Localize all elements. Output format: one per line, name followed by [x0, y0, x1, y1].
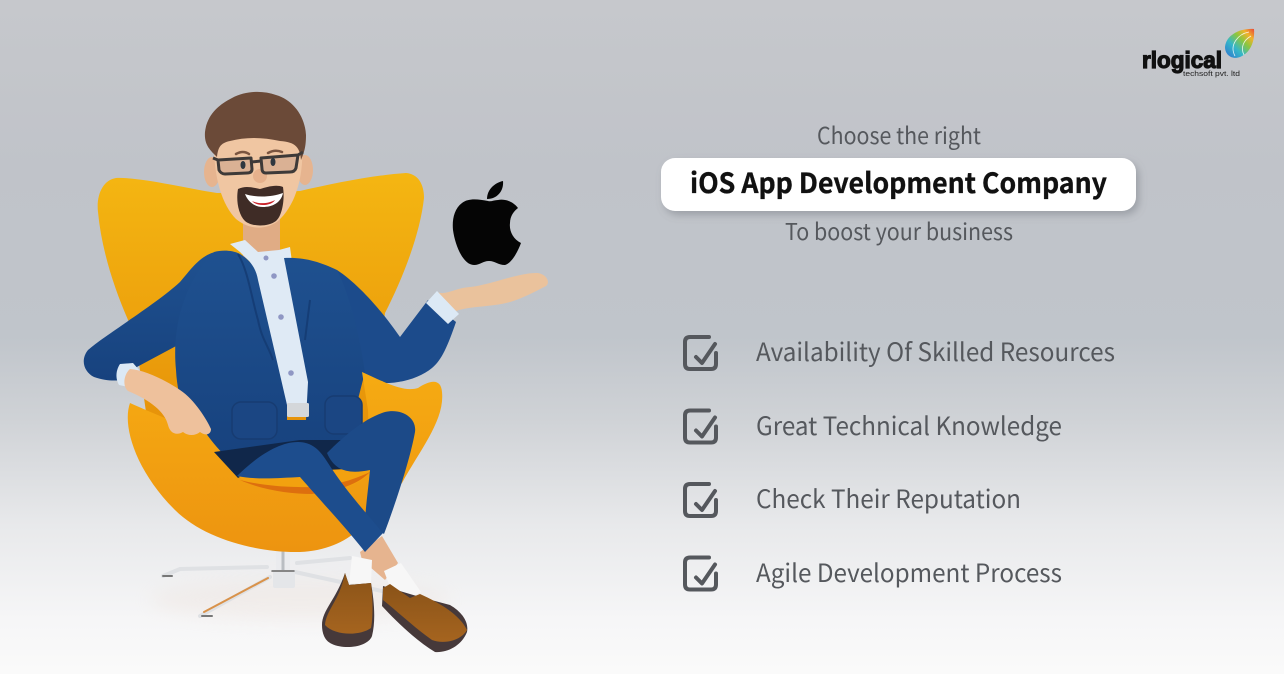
- chair seat bowl: [128, 372, 442, 552]
- front leg: [237, 442, 383, 552]
- icon: logo leaf: [1225, 29, 1254, 58]
- icon: checkbox: [685, 410, 716, 442]
- shirt: [230, 240, 315, 405]
- item text: Availability Of Skilled Resources: [756, 333, 1115, 369]
- subheading: to boost your business: To boost your business: [785, 213, 1013, 247]
- neck: [243, 218, 280, 258]
- logo tagline: techsoft pvt. ltd: [1183, 69, 1240, 78]
- chair back: [98, 173, 424, 440]
- logo wordmark: rlogical: [1142, 47, 1222, 73]
- item text: Great Technical Knowledge: [756, 407, 1062, 443]
- title text: iOS App Development Company: [690, 162, 1107, 202]
- heading: choose the right: Choose the right: [817, 117, 981, 151]
- right cuff: [426, 291, 459, 324]
- belt buckle: [287, 403, 309, 417]
- eyes and eyebrows: [240, 161, 246, 169]
- glasses: [213, 152, 303, 174]
- icon: checkbox: [685, 484, 716, 516]
- item text: Check Their Reputation: [756, 480, 1021, 516]
- icon: checkbox: [685, 558, 716, 590]
- beard: [237, 186, 284, 226]
- right hand: [437, 273, 548, 311]
- item text: Agile Development Process: [756, 554, 1062, 590]
- jacket lapel folds: [238, 254, 310, 360]
- ankle: [360, 536, 398, 580]
- logo: rlogical: [1142, 29, 1254, 78]
- left sock: [349, 556, 372, 584]
- floor shadow: [150, 580, 450, 620]
- item: check their reputation: [685, 480, 1021, 516]
- title pill: [661, 158, 1136, 211]
- icon: apple logo: [453, 181, 521, 265]
- item: great technical knowledge: [685, 407, 1062, 443]
- head: [205, 92, 306, 228]
- item: agile development process: [685, 554, 1062, 590]
- icon: checkbox: [685, 337, 716, 369]
- nose: [253, 169, 267, 183]
- left hand: [124, 369, 211, 435]
- item: availability of skilled resources: [685, 333, 1115, 369]
- shaded seat under jacket: [214, 440, 372, 480]
- chair cushion: [238, 467, 371, 494]
- ears: [204, 155, 313, 187]
- back leg: [327, 411, 415, 534]
- chair base: [163, 552, 382, 616]
- shirt buttons: [264, 256, 294, 376]
- left shoe: [322, 573, 374, 647]
- right sock: [384, 563, 421, 598]
- face: [214, 138, 302, 228]
- left cuff: [116, 363, 140, 388]
- checklist: [685, 333, 1115, 590]
- mouth: [245, 193, 283, 207]
- jacket pockets: [232, 396, 362, 439]
- jacket body: [175, 251, 365, 458]
- jacket right arm: [337, 270, 456, 383]
- jacket left arm: [84, 252, 215, 381]
- hair: [205, 92, 306, 160]
- right shoe: [382, 584, 467, 652]
- illustration: man in chair: [84, 92, 548, 652]
